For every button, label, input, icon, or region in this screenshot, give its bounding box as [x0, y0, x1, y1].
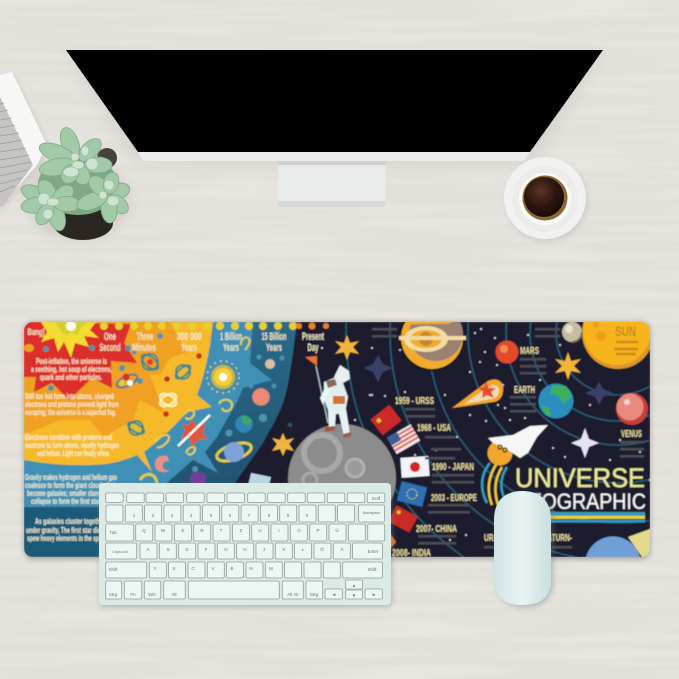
keyboard legends: U	[258, 528, 262, 533]
function key row	[106, 493, 385, 502]
coffee cup on saucer	[504, 157, 588, 242]
era headings: One	[104, 331, 116, 343]
era headings: Day	[308, 342, 319, 354]
particle nuclei	[119, 359, 186, 431]
timeline body text: Electrons combine with protons and	[25, 433, 112, 442]
keyboard legends: Shift	[108, 567, 118, 572]
keyboard legends: D	[185, 547, 189, 552]
era headings: 1 Billion	[220, 331, 242, 343]
keyboard legends: Strg	[310, 592, 319, 597]
bottom key row	[106, 580, 382, 599]
keyboard legends: J	[263, 547, 265, 552]
keyboard legends: I	[278, 528, 280, 533]
keyboard legends: 9	[287, 513, 290, 518]
keyboard legends: W	[161, 528, 166, 533]
timeline and planet labels	[392, 323, 642, 559]
keyboard legends: O	[297, 528, 301, 533]
magazine page	[0, 72, 50, 210]
keyboard legends: R	[200, 528, 204, 533]
atoms and particles	[115, 352, 192, 436]
keyboard legends: Alt Gr	[287, 592, 299, 597]
moon	[287, 423, 397, 502]
timeline body text: neutrons to form atoms, mostly hydrogen	[25, 441, 119, 450]
orange ring	[24, 322, 213, 472]
era headings: 15 Billion	[262, 331, 287, 343]
timeline body text: As galaxies cluster together	[35, 517, 105, 526]
timeline and planet labels: EARTH	[514, 384, 535, 396]
keyboard legends	[108, 496, 381, 598]
dark orange star	[24, 322, 187, 437]
bottom dark band	[24, 506, 99, 557]
keyboard legends: G	[224, 547, 228, 552]
timeline body text	[25, 357, 119, 543]
keyboard legends: Backspace	[363, 511, 380, 515]
timeline body text: quark and other particles.	[40, 373, 102, 382]
light blue ring	[24, 322, 272, 508]
era headings: Years	[181, 342, 197, 354]
keyboard legends: ►	[372, 592, 376, 597]
keyboard legends: 5	[210, 513, 213, 518]
keyboard legends: ▼	[352, 593, 356, 598]
potted succulent	[18, 125, 132, 240]
title: universe infographic: INFOGRAPHIC	[510, 489, 646, 514]
small blue dots	[43, 333, 163, 391]
timeline body text: spew heavy elements in the space	[27, 534, 107, 543]
keyboard legends: H	[243, 547, 247, 552]
keyboard legends: M	[269, 566, 273, 571]
era headings: Second	[100, 342, 120, 354]
orbit lines	[344, 322, 650, 557]
sun	[582, 322, 650, 370]
shift key row	[106, 562, 382, 578]
gold stars	[272, 335, 581, 456]
keyboard legends: N	[249, 566, 253, 571]
keyboard legends: 4	[190, 513, 193, 518]
keyboard legends: Entf	[372, 496, 381, 501]
pink swirl	[155, 456, 170, 472]
keyboard legends: E	[181, 528, 185, 533]
timeline body text: a seething, hot soup of electrons,	[31, 365, 112, 374]
timeline body text: and helium. Light can finally shine.	[37, 449, 110, 458]
era headings: Years	[266, 342, 282, 354]
keyboard legends: Win	[148, 592, 156, 597]
keyboard legends: Q	[142, 528, 146, 533]
flags	[370, 405, 430, 549]
star dots	[321, 328, 651, 541]
ringed planet	[398, 322, 467, 372]
mouse	[494, 491, 553, 607]
timeline and planet labels: MARS	[520, 345, 539, 357]
keyboard legends: Enter	[368, 549, 379, 554]
timeline body text: electrons and protons prevent light from	[25, 400, 119, 409]
timeline body text: collapse to form the first stars	[31, 497, 103, 506]
keyboard legends: 2	[152, 513, 155, 518]
swirls	[154, 337, 250, 455]
timeline and planet labels: 1959 - URSS	[395, 395, 434, 407]
keyboard legends: V	[211, 566, 215, 571]
timeline body text: Post-inflation, the universe is	[36, 357, 107, 366]
comet explosion	[178, 415, 210, 446]
keyboard legends: S	[166, 547, 170, 552]
galaxy	[207, 361, 239, 393]
keyboard legends: Z	[240, 528, 243, 533]
timeline and planet labels: 2007- CHINA	[416, 523, 457, 535]
keyboard legends: B	[230, 566, 234, 571]
keyboard legends: C	[191, 566, 195, 571]
teal ring	[166, 322, 298, 483]
title: universe infographic: UNIVERSE	[515, 463, 645, 493]
timeline body text: coalesce to form the giant clouds that	[25, 481, 115, 490]
keyboard legends: X	[172, 566, 176, 571]
monitor shadow	[66, 52, 603, 165]
keyboard legends: 7	[248, 513, 251, 518]
keyboard legends: 3	[171, 513, 174, 518]
keyboard legends: Strg	[109, 592, 118, 597]
era headings: Minutes	[132, 342, 156, 354]
white star	[571, 428, 599, 458]
timeline and planet labels: 1968 - USA	[417, 422, 451, 434]
timeline and planet labels: URANUS	[484, 532, 512, 544]
monitor stand	[278, 161, 386, 207]
keyboard legends: Shift	[367, 567, 377, 572]
dark diamond stars	[364, 355, 613, 405]
boundary dots	[100, 322, 329, 330]
keyboard legends: Ü	[335, 527, 339, 533]
monitor screen	[66, 50, 603, 161]
timeline and planet labels: VENUS	[621, 428, 642, 440]
era headings: Present	[302, 331, 324, 343]
keyboard legends: 8	[268, 513, 271, 518]
QWERTZ key row	[106, 524, 385, 541]
era headings: Bang]	[28, 327, 44, 337]
comet	[452, 379, 503, 408]
timeline and planet labels: 2008- INDIA	[392, 547, 431, 559]
timeline body text: become galaxies; smaller clumps	[27, 489, 105, 498]
keyboard legends: 1	[133, 513, 136, 518]
rocket flame trails	[482, 463, 507, 505]
keyboard legends: Tab	[109, 530, 117, 535]
knot on red	[24, 344, 34, 352]
era headings	[28, 327, 324, 354]
solar planets	[496, 322, 650, 557]
keyboard legends: ◄	[332, 592, 336, 597]
keyboard legends: Ä	[340, 546, 344, 552]
keyboard legends: 0	[306, 513, 309, 518]
timeline and planet labels: SUN	[615, 323, 636, 339]
space shuttle	[488, 425, 548, 466]
keyboard legends: Y	[153, 566, 157, 571]
keyboard legends: ▲	[352, 583, 356, 588]
era headings: Years	[223, 342, 239, 354]
red star	[24, 322, 137, 400]
keyboard legends: A	[146, 547, 150, 552]
timeline body text: Still too hot form into atoms, charged	[25, 392, 114, 401]
era headings: 300 000	[176, 331, 202, 343]
timeline and planet labels: 2003 - EUROPE	[431, 492, 477, 504]
title: universe infographic	[510, 463, 646, 522]
gray text placeholder bars	[372, 328, 644, 548]
astronaut	[305, 356, 351, 438]
keyboard legends: L	[302, 547, 305, 552]
keyboard legends: T	[220, 528, 223, 533]
timeline body text: escaping; the universe is a superhot fog.	[25, 408, 116, 417]
home key row	[106, 543, 382, 559]
era headings: Three	[136, 331, 154, 343]
red dots	[163, 353, 202, 417]
timeline body text: Gravity makes hydrogen and helium gas	[25, 473, 117, 482]
keyboard legends: Ö	[320, 546, 324, 552]
desk mat shadow	[24, 322, 650, 559]
keyboard legends: F	[205, 547, 208, 552]
planets in the teal band	[140, 354, 292, 490]
keyboard legends: 6	[229, 513, 232, 518]
timeline and planet labels: SATURN-	[543, 532, 572, 544]
keyboard legends: Fn	[130, 592, 136, 597]
mat artwork	[24, 322, 650, 557]
keyboard legends: Caps lock	[112, 550, 128, 554]
big bang star	[41, 321, 99, 358]
keyboard	[99, 483, 392, 607]
keyboard legends: K	[282, 547, 286, 552]
keyboard legends: Alt	[171, 592, 177, 597]
keyboard legends: P	[316, 528, 320, 533]
number key row	[106, 505, 384, 522]
timeline and planet labels: 1990 - JAPAN	[432, 461, 474, 473]
timeline body text: under gravity, The first star die and	[26, 526, 111, 535]
